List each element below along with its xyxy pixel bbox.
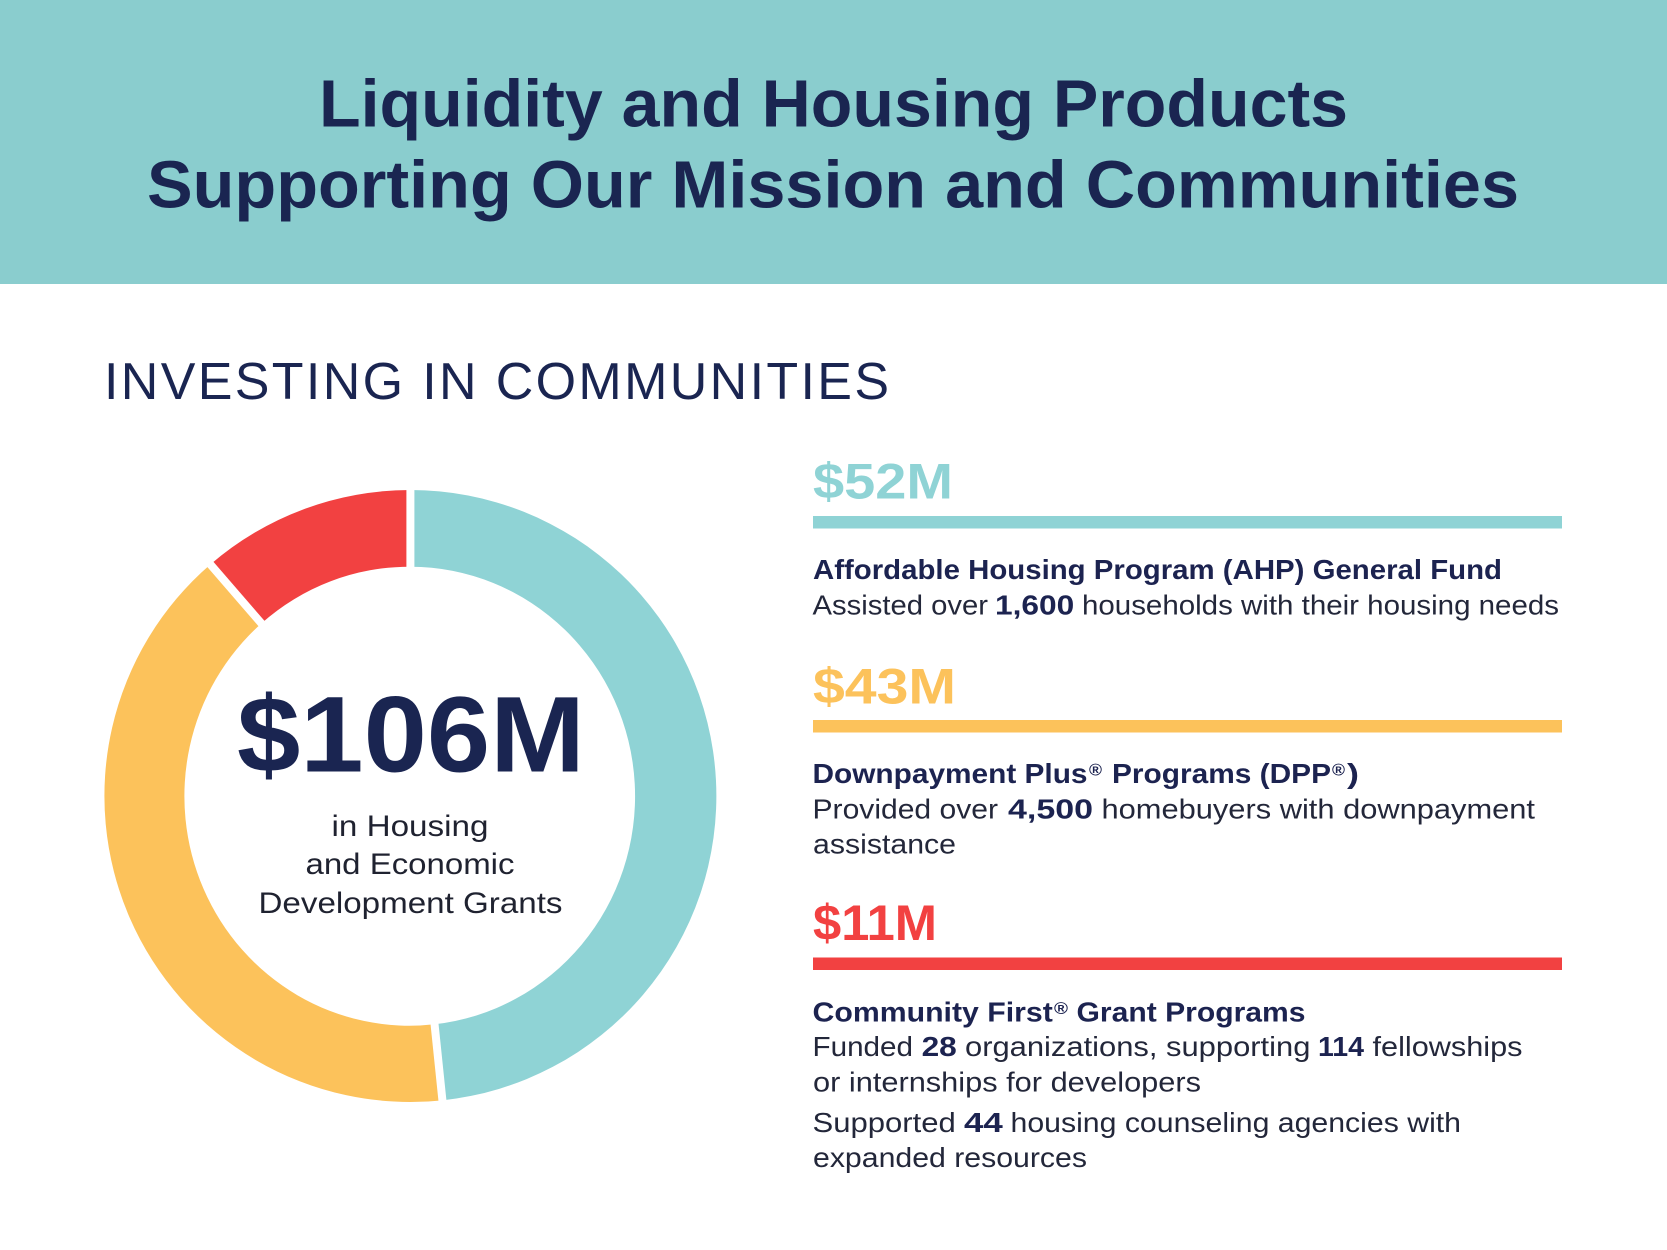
description: counseling: expanded resources xyxy=(813,1142,1087,1173)
description: fellowships: or internships for developers xyxy=(813,1066,1201,1098)
header banner xyxy=(0,0,1667,284)
description: fellowships: 28 xyxy=(922,1031,957,1062)
description: fellowships: 114 xyxy=(1318,1031,1364,1062)
donut caption: in Housing xyxy=(332,810,488,843)
panel: $43M Downpayment Plus xyxy=(812,658,1562,860)
segment: $11M red xyxy=(210,490,410,624)
program name: ® xyxy=(1054,999,1069,1018)
description: households with their housing needs xyxy=(1082,590,1559,620)
donut total: $106M xyxy=(237,674,585,794)
panel: $11M Community First xyxy=(812,895,1562,1173)
program name: ® xyxy=(1332,760,1345,780)
description: assistance xyxy=(813,828,956,860)
program name: Programs (DPP xyxy=(1112,758,1331,789)
title xyxy=(147,66,1519,222)
description: counseling: housing counseling agencies with xyxy=(1010,1107,1461,1138)
description xyxy=(812,794,1535,860)
donut caption: and Economic xyxy=(306,848,514,881)
description: counseling: Supported xyxy=(812,1107,956,1138)
program name xyxy=(812,996,1306,1028)
description: counseling: 44 xyxy=(964,1107,1003,1138)
segment: $43M yellow xyxy=(104,564,442,1102)
bar xyxy=(813,958,1562,970)
description: 1,600 xyxy=(995,590,1074,620)
description: fellowships: Funded xyxy=(812,1031,913,1062)
amount: $43M xyxy=(813,658,956,714)
segment: $52M teal xyxy=(410,490,716,1100)
program name xyxy=(812,758,1359,789)
title: Liquidity and Housing Products xyxy=(319,66,1348,142)
section heading: INVESTING IN COMMUNITIES xyxy=(104,353,889,411)
description: fellowships xyxy=(812,1031,1522,1098)
description: fellowships: organizations, supporting xyxy=(965,1031,1310,1062)
description: 4,500 xyxy=(1008,794,1093,824)
program name: Community First xyxy=(812,996,1053,1028)
description: Provided over xyxy=(812,794,998,824)
donut caption xyxy=(258,810,562,920)
bar xyxy=(813,516,1562,528)
program name: Affordable Housing Program (AHP) General Fund xyxy=(813,554,1502,585)
title: Supporting Our Mission and Communities xyxy=(147,148,1519,222)
panel: $52M Affordable Housing Program xyxy=(812,454,1562,620)
description: fellowships: fellowships xyxy=(1372,1031,1522,1062)
program name: ) xyxy=(1347,758,1359,789)
amount: $11M xyxy=(813,895,937,951)
amount: $52M xyxy=(813,454,953,510)
donut chart xyxy=(104,486,716,1106)
program name: ® xyxy=(1089,760,1102,780)
donut caption: Development Grants xyxy=(258,887,562,920)
bar xyxy=(813,720,1562,732)
program name: Downpayment Plus xyxy=(812,758,1088,789)
program name: Grant Programs xyxy=(1076,996,1306,1028)
description: homebuyers with downpayment xyxy=(1102,794,1535,824)
description: Assisted over xyxy=(812,590,988,620)
description: counseling xyxy=(812,1107,1461,1173)
